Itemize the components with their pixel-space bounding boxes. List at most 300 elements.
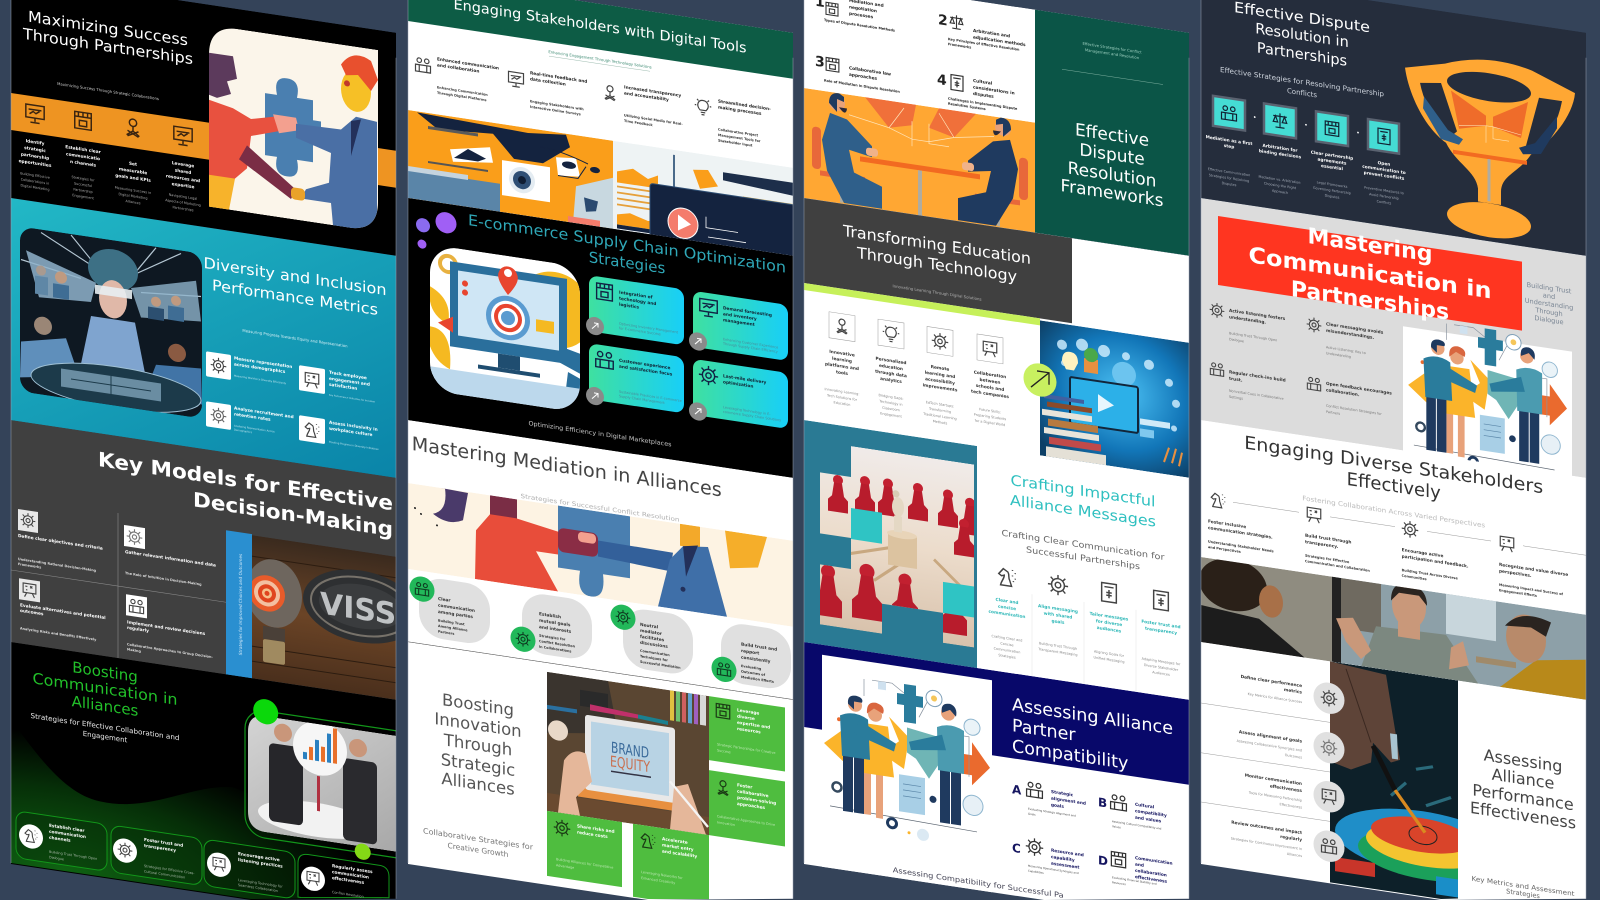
decision items: Gather relevant information and data <box>125 549 216 569</box>
title <box>1248 214 1492 332</box>
title: Partner <box>1012 716 1076 746</box>
card: assess: effectiveness <box>332 875 365 886</box>
education items: Technology in <box>878 399 903 407</box>
title: Frameworks <box>1061 176 1164 211</box>
benefit items: and collaboration <box>437 62 479 75</box>
card: trust <box>111 825 202 886</box>
numbered items: approaches <box>849 72 877 82</box>
title: Resolution in <box>1255 20 1349 51</box>
message items: Unified Messaging <box>1093 655 1125 664</box>
photo: tablet brand equity: BRAND <box>611 739 649 762</box>
education items: schools and <box>976 383 1004 393</box>
photo: tablet brand equity <box>547 672 709 835</box>
message items: Clear and <box>995 597 1019 606</box>
card: foster problem-solving: Collaborative Approaches to Drive <box>717 814 775 827</box>
communication items: collaboration. <box>1326 387 1360 398</box>
title: Through <box>443 730 512 760</box>
benefit items: Increased transparency <box>624 84 681 99</box>
item texts: expertise <box>172 181 194 191</box>
title: Engaging Diverse Stakeholders <box>1244 433 1543 498</box>
step: rapport: rapport <box>741 648 759 657</box>
card: market entry: Leveraging Networks for <box>641 870 683 880</box>
message items: Audiences <box>1152 670 1170 677</box>
resolution items: Arbitration for <box>1263 143 1298 154</box>
numbered items: Key Principles of Effective Resolution <box>948 37 1020 52</box>
stakeholder items: Communities <box>1402 574 1427 581</box>
benefit items: Utilizing Social Media for Real- <box>624 113 683 126</box>
card: channels: communication <box>49 829 86 840</box>
title: Compatibility <box>1012 737 1128 774</box>
benefit items: Management Tools for <box>718 133 761 143</box>
title: Maximizing Success: Maximizing Success <box>28 8 188 50</box>
illustration: team handshake <box>1403 316 1572 489</box>
step: goals: and interests <box>539 624 572 635</box>
item texts: Engagement <box>72 193 94 201</box>
step: goals: Strategies for <box>539 634 566 642</box>
decision items: Making <box>127 647 141 654</box>
compatibility items: Communication <box>1135 855 1173 867</box>
communication items: Partners <box>1326 410 1340 416</box>
title: Alliance <box>1492 765 1555 793</box>
title: Boosting <box>72 658 138 686</box>
numbered items: negotiation <box>849 4 877 14</box>
title <box>1244 433 1543 519</box>
card: listening <box>204 839 295 899</box>
step: communication <box>410 574 490 646</box>
item texts: Successful <box>74 181 92 188</box>
benefit items: Enhanced communication <box>437 56 499 72</box>
card: demand forecasting: Through Supply Chain Efficiency <box>722 342 778 354</box>
numbered items: Role of Mediation in Dispute Resolution <box>824 79 900 94</box>
step: mediator: Neutral <box>640 622 659 631</box>
item texts: partnership <box>21 151 49 162</box>
stakeholder items: transparency. <box>1305 539 1339 550</box>
compatibility items: Capabilities <box>1028 869 1044 875</box>
message items: Crafting Clear and <box>992 634 1022 643</box>
message items: communication <box>989 609 1025 620</box>
item texts: Partnerships <box>172 205 194 212</box>
education items <box>825 311 1009 435</box>
side note: and <box>1543 291 1555 301</box>
stakeholder items: Encourage active <box>1402 547 1443 559</box>
metric items: satisfaction <box>329 382 357 392</box>
metric list: Tools for Measuring Partnership <box>1248 791 1302 803</box>
resolution items: Mediation as a first <box>1206 134 1252 147</box>
compatibility items: assessment <box>1051 861 1079 871</box>
panel: Boosting Innovation slide <box>408 642 793 900</box>
metric items <box>206 351 379 453</box>
step: mediator: Techniques for <box>640 654 668 663</box>
communication items: Conflict Resolution Strategies for <box>1326 404 1382 416</box>
benefit items: Time Feedback <box>624 119 653 127</box>
card: foster problem-solving: Foster <box>737 782 753 791</box>
title: Alliances <box>441 769 515 799</box>
title: Assessing Alliance <box>1012 695 1173 739</box>
message items: transparency <box>1145 626 1177 636</box>
illustration: handshake band <box>408 483 793 627</box>
icons row <box>26 103 192 146</box>
card: foster problem-solving: approaches <box>737 801 765 811</box>
item texts <box>19 137 201 216</box>
compatibility items: capability <box>1051 854 1075 864</box>
metric list: regularly <box>1280 834 1302 843</box>
message items <box>989 565 1181 685</box>
card: demand forecasting: and inventory <box>723 311 757 322</box>
panel: Effective Dispute Resolution in Partnerships slide <box>1201 0 1586 256</box>
card: listening: Seamless Collaboration <box>238 883 278 893</box>
compatibility items: Measuring Operational Synergies and <box>1028 864 1079 875</box>
communication items: understanding. <box>1229 314 1266 326</box>
illustration: two men negotiating <box>804 88 1035 233</box>
step: goals: mutual goals <box>539 618 571 628</box>
card: last-mile delivery: Leveraging Technology in E- <box>723 405 771 416</box>
decision items: outcomes <box>20 608 44 617</box>
education items: tech companies <box>971 389 1009 400</box>
panel: Transforming Education slide <box>804 198 1189 479</box>
title: Alliances <box>72 692 139 720</box>
numbered items: considerations in <box>973 84 1015 97</box>
panel: Boosting Communication slide <box>11 642 415 900</box>
numbered items: 3 <box>815 54 825 71</box>
metric items: Analyze recruitment and <box>234 405 294 420</box>
step: rapport <box>712 620 791 692</box>
stakeholder items <box>1208 491 1568 603</box>
metric items: Track employee <box>329 370 367 381</box>
title: Mastering <box>1307 223 1433 268</box>
title: Partnerships <box>1291 276 1449 326</box>
title: Strategies <box>589 248 665 278</box>
subtitle: Creative Growth <box>448 841 509 859</box>
decorative teal squares <box>851 508 974 618</box>
compatibility items: C <box>1012 841 1021 856</box>
title: Innovation <box>434 709 522 741</box>
resolution items: Avoid Partnership <box>1369 192 1399 201</box>
dot: green circle <box>253 697 278 726</box>
education items: accessibility <box>925 376 955 387</box>
vertical blue bar <box>226 530 252 679</box>
illustration: team handshake <box>824 672 990 851</box>
compatibility items: alignment and <box>1051 796 1086 807</box>
education items: Engagement <box>880 411 902 419</box>
card: trust: Foster trust and <box>144 837 183 849</box>
education items: for a Digital World <box>975 419 1005 427</box>
column edge lines <box>408 0 793 900</box>
step: rapport: Outcomes of <box>741 669 766 677</box>
subtitle: Strategies for Effective Collaboration and <box>30 711 179 742</box>
communication items: Dialogue <box>1229 337 1244 343</box>
compatibility items: and <box>1135 861 1144 869</box>
step: mediator <box>610 603 693 677</box>
side note: Dialogue <box>1534 314 1564 326</box>
numbered items: Frameworks <box>948 42 971 50</box>
compatibility items: Values <box>1112 824 1121 830</box>
item texts: Digital Marketing <box>21 183 49 192</box>
benefit items: data collection <box>530 76 566 88</box>
communication items: Regular check-ins build <box>1229 369 1286 384</box>
card: listening: Leveraging Technology for <box>238 878 283 889</box>
step: rapport: Evaluating <box>741 664 762 671</box>
title: Crafting Impactful <box>1011 472 1156 511</box>
card: customer experience: Supply Chain Management <box>619 394 665 405</box>
education items: platforms and <box>825 361 859 372</box>
education items: Classroom <box>882 406 901 412</box>
resolution items: Conflicts <box>1377 199 1392 206</box>
subtitle: Management and Resolution <box>1085 47 1140 60</box>
footer caption: Assessing Compatibility for Successful Pa <box>893 865 1064 900</box>
resolution items: Preventive Measures to <box>1364 185 1404 195</box>
card: leverage expertise: expertise and <box>737 720 770 731</box>
item texts: Digital Marketing <box>119 192 147 200</box>
metric list: Assessing Collaborative Synergies and <box>1237 739 1302 753</box>
numbered items: Resolution Systems <box>948 102 986 111</box>
numbered items: 2 <box>938 12 948 30</box>
title: Performance Metrics <box>212 276 378 319</box>
column 1 of slides <box>11 0 419 900</box>
card: assess <box>298 853 389 900</box>
card: channels: Dialogue <box>49 855 64 861</box>
subtitle <box>1002 529 1165 576</box>
decision items: Understanding Rational Decision-Making <box>18 557 97 573</box>
side note: Understanding <box>1525 297 1573 312</box>
card: market entry: and scalability <box>662 849 697 860</box>
card: assess: communication <box>332 869 369 881</box>
compatibility items: effectiveness <box>1135 874 1168 885</box>
card: leverage expertise: Leverage <box>737 707 759 717</box>
side note: Through <box>1534 306 1563 318</box>
title: Diversity and Inclusion <box>203 254 386 299</box>
education items: Traditional Learning <box>922 412 957 421</box>
metric items: Key Performance Indicators for Inclusion <box>329 394 376 404</box>
item texts: resources and <box>166 173 200 184</box>
subtitle: Effective Strategies for Resolving Partnership <box>1220 65 1385 99</box>
photo: bulb target and vision sign: VISSI <box>320 587 407 634</box>
card: foster problem-solving: Innovation <box>717 820 735 827</box>
panel: Assessing Alliance Partner Compatibility slide <box>804 642 1189 900</box>
card: technology integration: logistics <box>619 302 640 311</box>
item texts: Collaborations in <box>21 177 49 186</box>
card: technology integration: for E-commerce Success <box>619 326 661 336</box>
resolution items: essential <box>1321 163 1343 172</box>
card: trust: Strategies for Effective Cross- <box>144 864 195 876</box>
resolution items: Disputes <box>1325 194 1340 200</box>
communication items: Active Listening: Key to <box>1326 345 1366 355</box>
education items: Bridging Gaps: <box>878 393 904 401</box>
title: Key Models for Effective <box>98 447 393 515</box>
subtitle: Innovating Learning Through Digital Solutions <box>892 283 982 302</box>
card: technology integration: technology and <box>619 296 656 307</box>
numbered items: 4 <box>937 72 947 89</box>
title <box>1010 472 1156 531</box>
compatibility items: Resources <box>1112 880 1126 886</box>
resolution items: step <box>1224 143 1234 150</box>
subtitle: Fostering Collaboration Across Varied Perspectives <box>1302 494 1486 530</box>
resolution items: Clear partnership <box>1311 149 1353 162</box>
compatibility items: Resource and <box>1051 848 1084 858</box>
resolution items: communication to <box>1362 164 1406 176</box>
metric items: Tracking Progress in Diversity Initiatives <box>329 440 379 451</box>
card: share risks <box>547 811 622 887</box>
subtitle: Conflicts <box>1287 86 1317 99</box>
metric items: across demographics <box>234 361 286 375</box>
subtitle: Enhancing Engagement Through Technology Solutions <box>548 49 652 70</box>
illustration: trophy with negotiators <box>1405 47 1575 250</box>
resolution items: Mediation vs. Arbitration: <box>1259 175 1301 185</box>
decision items: Define clear objectives and criteria <box>18 533 103 552</box>
title: Assessing <box>1484 745 1562 776</box>
resolution items <box>1206 95 1406 213</box>
message items: Building Trust Through <box>1039 641 1077 651</box>
illustration: laptop and books <box>1040 320 1189 478</box>
metric list: Alliances <box>1287 852 1302 858</box>
card: demand forecasting: management <box>723 317 755 328</box>
column edge lines <box>1201 0 1586 900</box>
title: Resolution <box>1068 159 1156 192</box>
panel: Mastering Mediation slide <box>408 420 793 701</box>
item texts: communicatio <box>66 151 100 162</box>
decision items: regularly <box>127 625 149 634</box>
title: Dispute <box>1079 140 1145 170</box>
decision items: Frameworks <box>18 562 41 570</box>
metric items: Analyzing Representation Across <box>234 423 275 434</box>
card: listening: Encourage active <box>238 851 280 863</box>
compatibility items: A <box>1012 782 1022 798</box>
communication items <box>1210 302 1392 424</box>
step: goals <box>510 589 592 662</box>
compatibility items: Assessing Cultural Compatibility and <box>1112 819 1162 831</box>
stakeholder items: and Perspectives <box>1208 545 1241 554</box>
education items: Methods <box>933 419 947 426</box>
step: rapport: Mediation Efforts <box>741 675 774 684</box>
panel: Assessing Alliance Performance slide <box>1201 642 1586 900</box>
title <box>1470 743 1576 833</box>
card: market entry: Accelerate <box>662 836 688 846</box>
compatibility items: Goals <box>1028 812 1036 817</box>
education items: Tech Solutions for <box>826 393 858 402</box>
metric list: Define clear performance <box>1241 674 1302 689</box>
communication items: Settings <box>1229 395 1243 401</box>
card: demand forecasting <box>689 290 788 364</box>
card: technology integration: Optimizing Inventory Management <box>619 322 679 335</box>
title: Maximizing Success: Through Partnerships <box>22 25 193 68</box>
education items: Preparing Students <box>974 412 1006 421</box>
resolution items: Legal Frameworks <box>1317 180 1348 189</box>
card: last-mile delivery <box>689 358 788 434</box>
metric items: Assess inclusivity in <box>329 420 378 433</box>
stakeholder items: Foster inclusive <box>1208 519 1246 530</box>
column 2 of slides <box>408 0 795 900</box>
resolution items: Disputes <box>1222 181 1237 187</box>
subtitle: Effective Strategies for Conflict <box>1082 41 1142 55</box>
column edge lines <box>804 0 1189 900</box>
title: Decision-Making <box>193 487 393 541</box>
title <box>1061 118 1164 211</box>
numbered items: adjudication methods <box>973 34 1026 48</box>
message items: Transparent Messaging <box>1037 647 1078 657</box>
education items: Future Skills: <box>979 407 1001 415</box>
item texts: Alliances <box>125 199 141 205</box>
panel: Engaging Stakeholders slide <box>408 0 795 260</box>
communication items: Understanding <box>1326 351 1351 359</box>
title: Communication in <box>32 669 178 709</box>
card: customer experience <box>586 343 684 418</box>
title: Through Technology <box>856 244 1017 286</box>
card: demand forecasting: Enhancing Customer Experience <box>723 337 778 350</box>
item texts: Identify <box>26 138 45 147</box>
metric items: retention rates <box>234 411 271 423</box>
metric items: Demographics <box>234 427 253 434</box>
stakeholder items: Building Trust Across Diverse <box>1402 568 1458 581</box>
step: mediator: mediator <box>640 628 663 637</box>
vertical blue bar: Strategies for Improved Choices and Outcomes <box>238 553 244 656</box>
metric list: Effectiveness <box>1279 802 1302 810</box>
subtitle: Successful Partnerships <box>1026 545 1141 572</box>
subtitle: Crafting Clear Communication for <box>1002 529 1165 563</box>
message items: Concise <box>1000 641 1014 647</box>
decision items: Evaluate alternatives and potential <box>20 602 106 621</box>
resolution items: binding decisions <box>1259 148 1302 161</box>
card: share risks: reduce costs <box>577 830 608 840</box>
column 3 of slides <box>804 0 1189 900</box>
title: Performance <box>1472 780 1574 814</box>
card: share risks: Advantage <box>556 863 574 870</box>
subtitle: Maximizing Success Through Strategic Collaborations <box>57 81 159 101</box>
card: foster problem-solving: collaborative <box>737 789 769 799</box>
card: technology integration <box>586 275 684 348</box>
education items: Innovating Learning: <box>825 387 859 396</box>
card: leverage expertise: resources <box>737 726 761 736</box>
card: customer experience: Customer experience <box>619 358 670 371</box>
stakeholder items: Measuring Impact and Success of <box>1499 583 1564 596</box>
card: assess: Regularly assess <box>332 863 373 875</box>
stakeholder items: Strategies for Effective <box>1305 554 1350 564</box>
message items: Aligning Goals for <box>1094 650 1125 658</box>
step: mediator: Successful Mediation <box>640 660 681 670</box>
numbered items: Challenges in Implementing Dispute <box>948 97 1018 111</box>
metric list: Strategies for Continuous Improvement in <box>1231 836 1302 851</box>
stakeholder items: Recognize and value diverse <box>1499 562 1568 578</box>
metric list: metrics <box>1284 687 1302 696</box>
title: Strategic <box>441 750 515 780</box>
stakeholder items: Build trust through <box>1305 533 1351 546</box>
subtitle <box>1062 38 1163 84</box>
compatibility items: B <box>1098 795 1107 810</box>
illustration: digital tools collage <box>408 110 795 260</box>
resolution items: Approach <box>1272 189 1288 195</box>
benefit items: making processes <box>718 105 762 117</box>
education items: analytics <box>880 376 902 385</box>
footer caption: Optimizing Efficiency in Digital Marketplaces <box>529 420 672 449</box>
subtitle: Collaborative Strategies for <box>423 826 534 852</box>
photo: two executives with chart <box>244 712 396 858</box>
card: leverage expertise: Success <box>717 748 731 754</box>
item texts: opportunities <box>19 158 52 169</box>
step: mediator: Communication <box>640 649 670 657</box>
compatibility items: Evaluating Financial Stability and <box>1112 875 1157 886</box>
message items: audiences <box>1097 625 1122 635</box>
numbered items: Cultural <box>973 78 993 87</box>
resolution items: Strategies for Resolving <box>1209 173 1249 183</box>
decision items: Implement and review decisions <box>127 619 206 637</box>
card: demand forecasting: Demand forecasting <box>723 305 772 319</box>
title: Mastering Mediation in Alliances <box>412 432 722 502</box>
message items: Align messaging <box>1038 603 1078 615</box>
step: rapport: Build trust and <box>741 641 777 653</box>
item texts: Partnership <box>73 187 93 194</box>
compatibility items: D <box>1098 853 1108 869</box>
step: communication: Clear <box>438 596 451 604</box>
message items: Foster trust and <box>1141 619 1181 630</box>
resolution items: Open <box>1378 160 1390 168</box>
